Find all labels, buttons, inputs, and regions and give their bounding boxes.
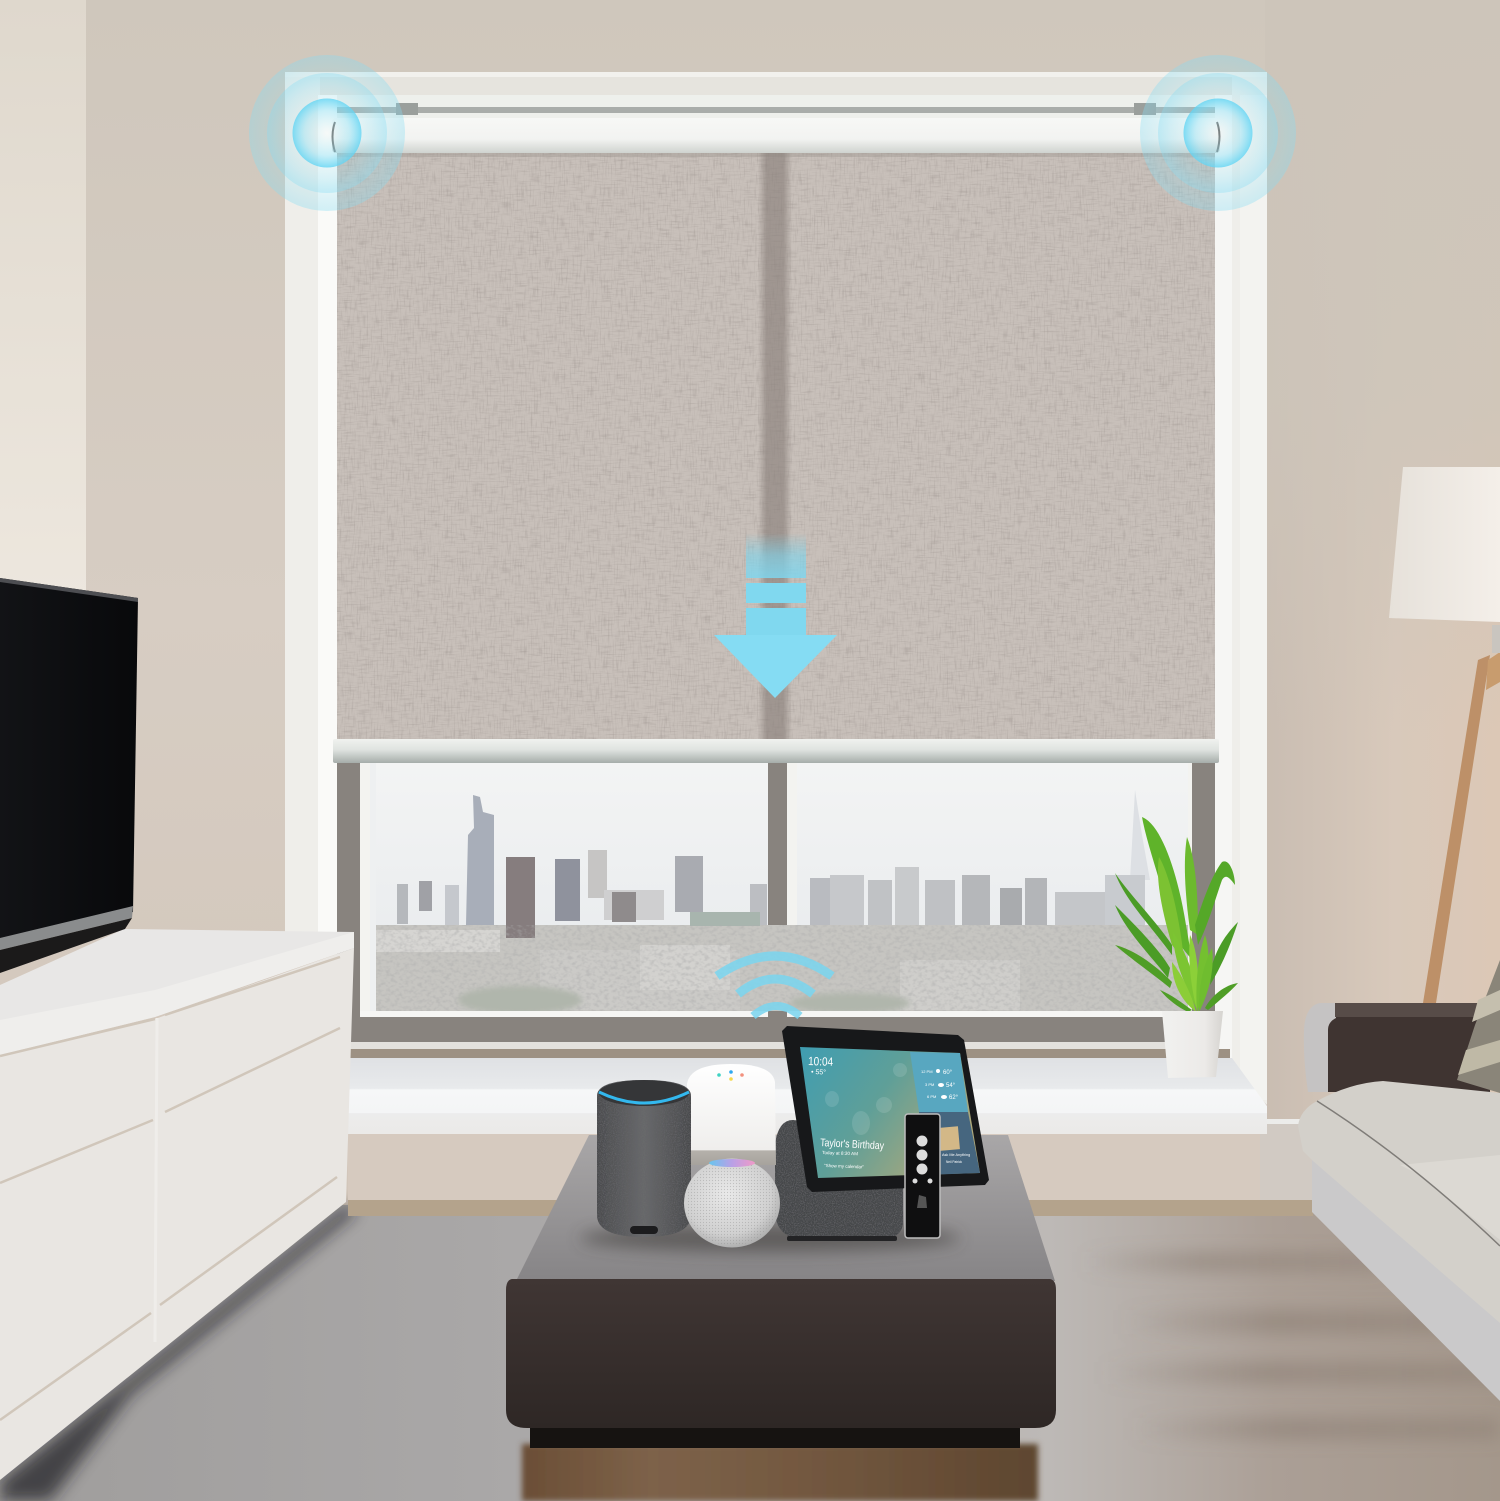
screen text: 10:04 (808, 1054, 834, 1069)
floor (0, 1204, 1500, 1501)
sofa cushion (1298, 1081, 1500, 1323)
device: remote control (905, 1114, 940, 1238)
screen text: "Show my calendar" (824, 1163, 865, 1169)
plant pot (1162, 1011, 1223, 1078)
device: amazon echo speaker (597, 1080, 691, 1237)
screen text: 54° (946, 1083, 956, 1089)
tv (0, 578, 138, 973)
screen text: Today at 8:30 AM (822, 1150, 858, 1156)
screen text: Neil Patrick (946, 1160, 963, 1164)
wall below sill and baseboard (348, 1119, 1313, 1216)
roller tube headrail (332, 103, 1220, 153)
screen text: 6 PM (927, 1094, 936, 1099)
bottom rail (333, 739, 1219, 763)
window sill (348, 1058, 1267, 1134)
icon: signal waves left (249, 55, 405, 211)
arrow: shade moving down (714, 533, 837, 698)
device: echo show tablet (782, 1026, 989, 1192)
device: google home (687, 1064, 776, 1165)
device: echo show base (775, 1120, 903, 1241)
smart devices (597, 1026, 989, 1248)
screen text (808, 1054, 970, 1169)
sofa arm (1304, 1003, 1483, 1092)
city skyline (376, 792, 1188, 1011)
pillow (1457, 960, 1500, 1093)
roller shade fabric (337, 152, 1215, 740)
screen text: Taylor's Birthday (820, 1137, 885, 1152)
window frame and glass (337, 750, 1230, 1058)
device shadow (580, 1224, 960, 1252)
sofa (1298, 960, 1500, 1401)
screen text: 3 PM (925, 1082, 934, 1087)
tv cabinet (0, 929, 354, 1480)
ottoman (506, 1135, 1056, 1448)
icon: signal waves right (1140, 55, 1296, 211)
icon: wifi arcs (717, 956, 832, 1016)
screen text: 60° (943, 1070, 953, 1076)
screen text: Ask Me Anything (942, 1153, 970, 1157)
device: homepod mini (684, 1158, 780, 1248)
screen text: 12 PM (921, 1069, 933, 1074)
window trim (285, 72, 1267, 1105)
screen text: • 55° (811, 1068, 826, 1077)
plant (1115, 817, 1238, 1078)
floor lamp (1389, 467, 1500, 1003)
screen text: 62° (949, 1095, 959, 1101)
sofa base (1312, 1153, 1500, 1401)
